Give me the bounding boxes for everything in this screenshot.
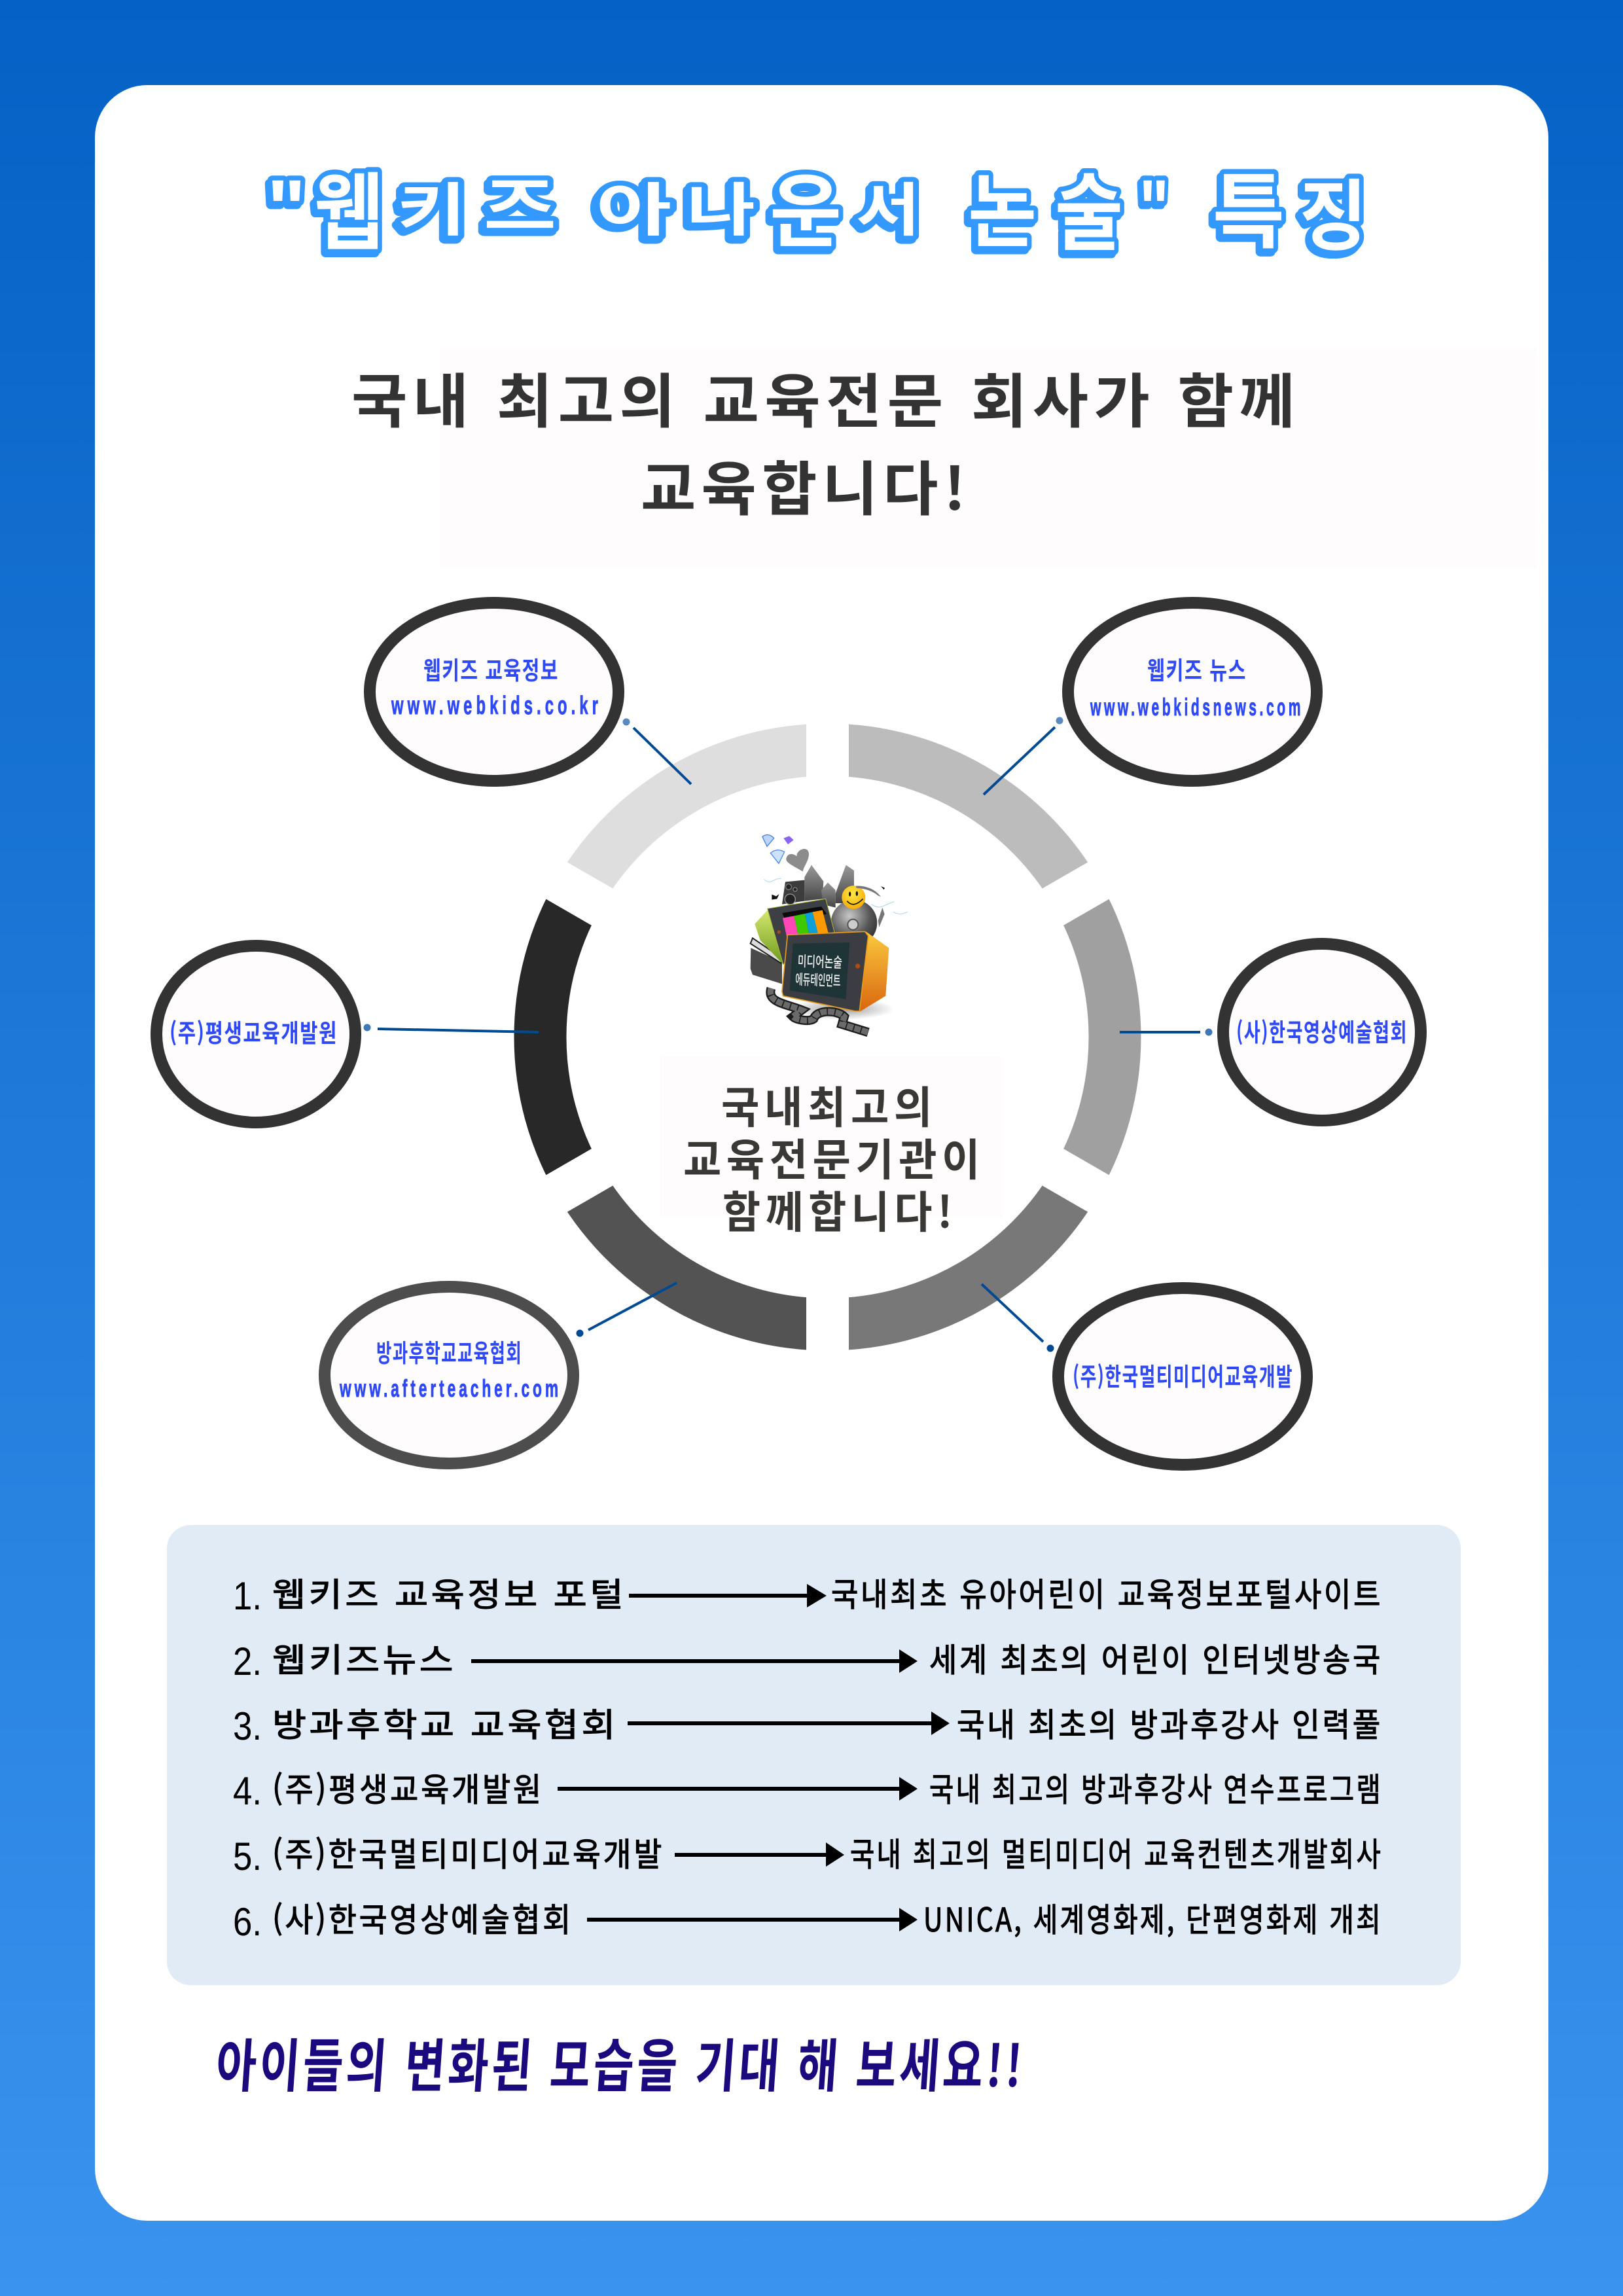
bubble: after school teachers [325, 1287, 573, 1463]
bubble: webkids: www.webkids.co.kr [391, 692, 602, 720]
connector: top right [984, 717, 1063, 795]
title: 아 [596, 164, 671, 247]
title: " [1139, 164, 1169, 255]
row 1: 웹키즈 교육정보 포털 [272, 1569, 626, 1616]
centre text [683, 1073, 985, 1241]
closing message: 아이들의 변화된 모습을 기대 해 보세요!! [213, 2020, 1028, 2104]
clapper board [751, 938, 782, 984]
centre text: 국내최고의 [721, 1073, 937, 1136]
subtitle: 국내 최고의 교육전문 회사가 함께 [351, 354, 1300, 439]
title: 징 [1299, 154, 1367, 266]
row 2: 2. [233, 1640, 262, 1683]
music notes [856, 886, 885, 927]
row 5: 국내 최고의 멀티미디어 교육컨텐츠개발회사 [850, 1829, 1383, 1876]
title: 키 [397, 164, 466, 247]
title: 웹 [314, 145, 383, 266]
bubble: webkids news: 웹키즈 뉴스 [1147, 651, 1247, 687]
bubble: film arts association [1223, 944, 1421, 1121]
row 4: 국내 최고의 방과후강사 연수프로그램 [929, 1764, 1383, 1811]
speaker box [782, 880, 804, 905]
row 5: 5. [233, 1835, 262, 1878]
bubble: after school teachers: www.afterteacher.com [339, 1375, 562, 1402]
row 2: 웹키즈뉴스 [272, 1634, 456, 1681]
segment: right [1077, 893, 1115, 1181]
list panel [167, 1525, 1461, 1985]
connector: left [364, 1024, 539, 1032]
title: 즈 [484, 155, 556, 248]
segment: bottom right [827, 1181, 1077, 1325]
row 3 [233, 1699, 1383, 1748]
title: 서 [856, 164, 920, 247]
centre text: 교육전문기관이 [683, 1125, 985, 1189]
connector: right [1120, 1029, 1212, 1035]
bubble: multimedia education [1058, 1288, 1307, 1465]
row 6: UNICA, 세계영화제, 단편영화제 개최 [923, 1894, 1383, 1941]
row 6: 6. [233, 1900, 262, 1944]
bubble: webkids: 웹키즈 교육정보 [423, 651, 559, 687]
subtitle: 교육합니다! [641, 442, 971, 527]
icon: media TV illustration [751, 834, 908, 1032]
connector: bottom right [982, 1284, 1054, 1352]
shadow under TV [790, 998, 895, 1020]
connector: bottom left [576, 1283, 677, 1336]
orange TV: 에듀테인먼트 [795, 968, 841, 990]
smiley [842, 886, 865, 909]
orange TV [782, 931, 889, 1012]
round speaker [831, 900, 877, 946]
film strip [770, 988, 868, 1032]
row 5: (주)한국멀티미디어교육개발 [272, 1829, 664, 1876]
row 4: (주)평생교육개발원 [272, 1764, 544, 1811]
bubble: film arts association: (사)한국영상예술협회 [1236, 1013, 1408, 1049]
segment: top left [579, 749, 827, 893]
bubble: webkids news [1068, 603, 1317, 781]
row 3: 방과후학교 교육협회 [272, 1699, 618, 1746]
segmented ring [540, 749, 1115, 1325]
row 2: 세계 최초의 어린이 인터넷방송국 [929, 1634, 1383, 1681]
row 6 [233, 1894, 1383, 1944]
segment: bottom left [579, 1181, 827, 1325]
title: 술 [1055, 146, 1123, 267]
row 6: (사)한국영상예술협회 [272, 1894, 573, 1941]
bubble: after school teachers: 방과후학교교육협회 [376, 1333, 522, 1369]
orange TV: 미디어논술 [797, 950, 842, 972]
bubble: lifelong education: (주)평생교육개발원 [169, 1013, 338, 1049]
bubble: lifelong education [156, 946, 355, 1122]
centre text backing patch [660, 1056, 1003, 1217]
subtitle backing patch [439, 348, 1537, 568]
row 3: 국내 최초의 방과후강사 인력풀 [957, 1699, 1383, 1746]
row 4 [233, 1764, 1383, 1813]
row 3: 3. [233, 1704, 262, 1748]
green TV [755, 899, 836, 964]
connector: top left [623, 719, 691, 784]
bubble: multimedia education: (주)한국멀티미디어교육개발 [1073, 1357, 1293, 1393]
row 1: 국내최초 유아어린이 교육정보포털사이트 [831, 1569, 1383, 1616]
row 2 [233, 1634, 1383, 1683]
buildings [804, 865, 854, 908]
parachutes and decorations [762, 834, 908, 914]
segment: left [540, 893, 579, 1181]
title: 논 [968, 148, 1037, 264]
segment: top right [827, 750, 1077, 893]
centre text: 함께합니다! [722, 1177, 957, 1241]
row 1 [233, 1569, 1383, 1618]
bubble: webkids [370, 603, 618, 781]
title: 운 [770, 148, 842, 264]
bubble: webkids news: www.webkidsnews.com [1090, 694, 1304, 721]
title [267, 145, 1367, 267]
row 4: 4. [233, 1769, 262, 1813]
row 5 [233, 1829, 1383, 1878]
title: " [267, 164, 306, 255]
title: 특 [1213, 146, 1285, 264]
row 1: 1. [233, 1574, 262, 1618]
subtitle [351, 354, 1300, 527]
title: 나 [687, 164, 755, 247]
